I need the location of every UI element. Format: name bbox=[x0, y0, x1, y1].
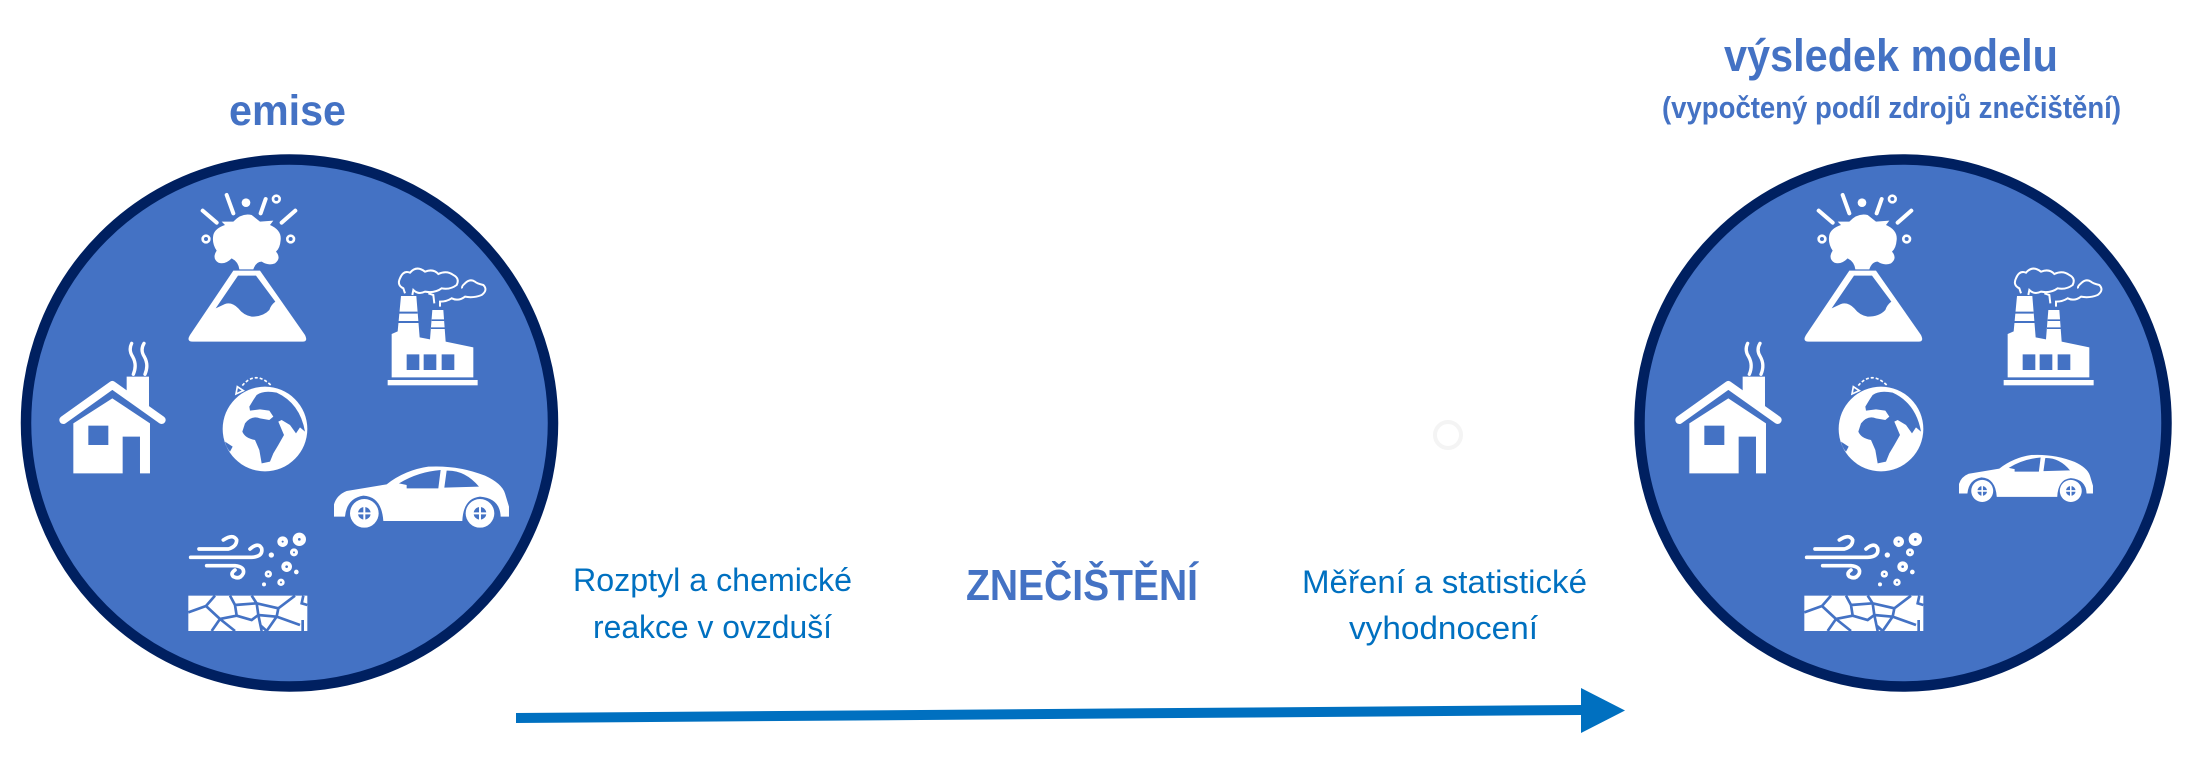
text: measurement and statistical evaluation: Měření a statistické bbox=[1302, 564, 1587, 600]
text: measurement and statistical evaluation bbox=[1302, 564, 1587, 646]
text: dispersion and chemical reactions: reakce v ovzduší bbox=[593, 609, 832, 645]
icon: house bbox=[1679, 343, 1778, 473]
text: dispersion and chemical reactions bbox=[573, 562, 852, 645]
panel: model result circle bbox=[1640, 160, 2166, 686]
heading: emise: emise bbox=[229, 87, 346, 135]
icon: globe bbox=[223, 378, 307, 471]
text: dispersion and chemical reactions: Rozptyl a chemické bbox=[573, 562, 852, 598]
label: znečištění: ZNEČIŠTĚNÍ bbox=[966, 559, 1200, 610]
icon: wind and dust over soil bbox=[1804, 533, 1923, 631]
subheading: vypočtený podíl zdrojů znečištění: (vypočtený podíl zdrojů znečištění) bbox=[1662, 90, 2121, 125]
icon: factory bbox=[388, 269, 485, 385]
faint smudge bbox=[1435, 422, 1461, 448]
icon: volcano bbox=[188, 195, 306, 342]
icon: car (smaller) bbox=[1959, 455, 2093, 502]
icon: volcano bbox=[1804, 195, 1922, 342]
text: measurement and statistical evaluation: vyhodnocení bbox=[1349, 610, 1538, 646]
icon: wind and dust over soil bbox=[188, 533, 307, 631]
panel: emissions circle bbox=[26, 160, 553, 686]
icon: factory bbox=[2004, 269, 2101, 385]
icon: globe bbox=[1839, 378, 1923, 471]
icon: house bbox=[63, 343, 162, 473]
heading: výsledek modelu: výsledek modelu bbox=[1724, 30, 2058, 81]
icon: car bbox=[334, 466, 509, 528]
arrow bbox=[516, 688, 1625, 733]
